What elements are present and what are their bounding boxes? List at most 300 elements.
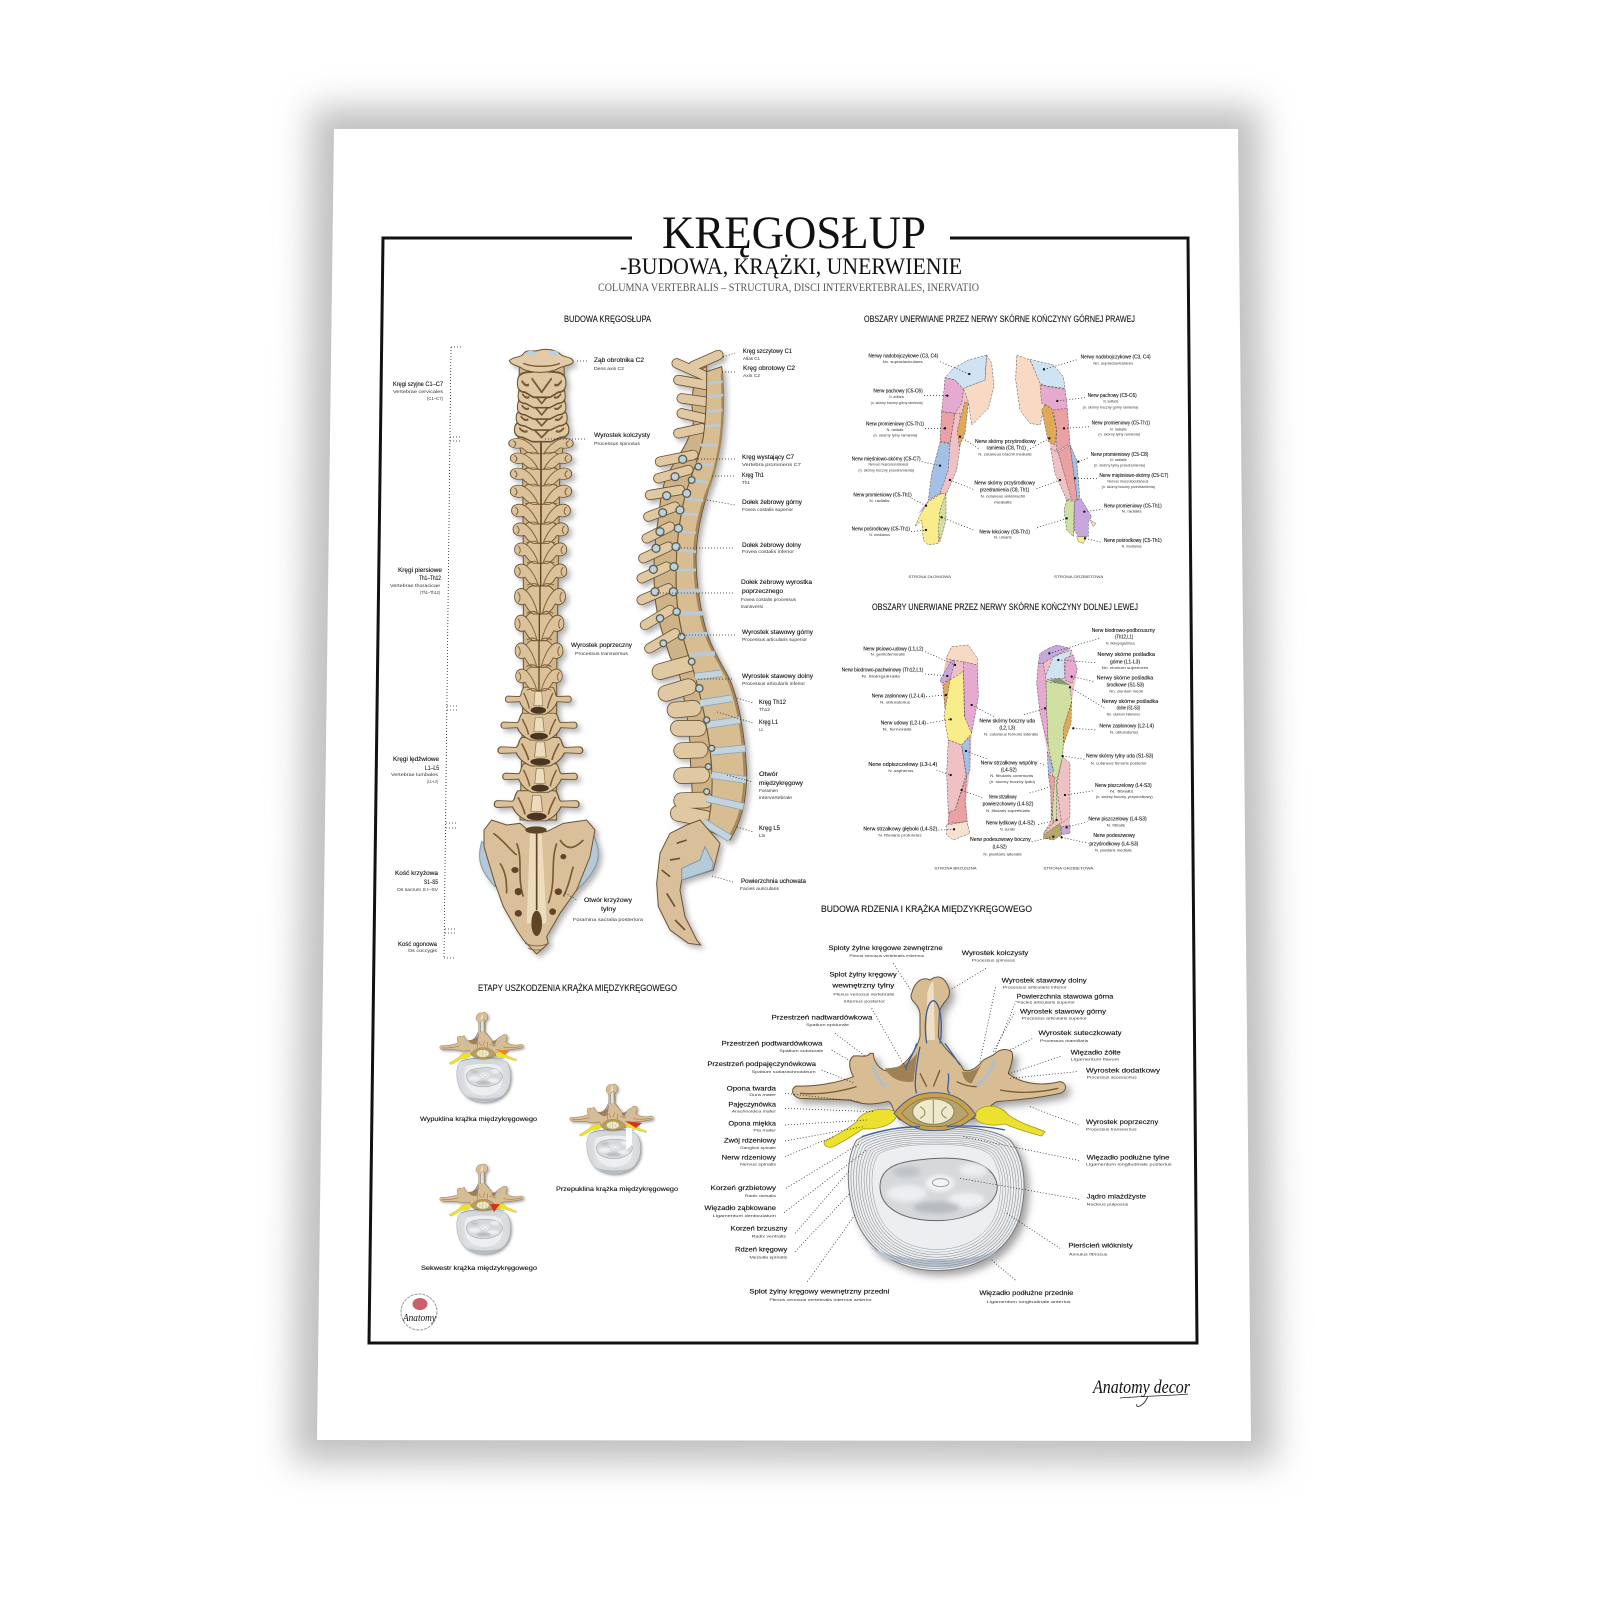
label: lumbar — [391, 756, 439, 784]
callout: common fibular: (L4-S2) — [1001, 767, 1017, 773]
callout: superior articular process — [993, 1008, 1107, 1052]
view captions — [908, 575, 1104, 579]
callout: inferior articular process: Wyrostek stawowy dolny — [742, 673, 814, 680]
callout: superior articular process: Processus articularis superior — [742, 637, 807, 642]
stage: disc bulge — [420, 1012, 537, 1123]
callout: median right — [1085, 538, 1162, 549]
callout: transverse process — [1030, 1107, 1159, 1131]
callout: inferior cluneal — [1070, 687, 1158, 717]
callout: medial brachial cutaneous: N. cutaneus brachii medialis — [978, 453, 1032, 457]
callout: posterior internal plexus: Splot żylny kręgowy — [829, 972, 897, 979]
label: thoracic — [390, 567, 442, 595]
callout: axillary right: N. axillaris — [1103, 399, 1118, 403]
callout: accessory process: Wyrostek dodatkowy — [1086, 1068, 1161, 1075]
callout: inferior articular process: Processus articularis inferior — [1003, 985, 1068, 990]
label: thoracic: Vertebrae thoracicae — [390, 583, 441, 588]
callout: inferior costal facet — [678, 542, 802, 554]
callout: anterior internal plexus: Plexus venosus vertebralis internus anterior — [769, 1297, 873, 1302]
label: lumbar: L1–L5 — [425, 765, 439, 772]
stage: disc herniation — [556, 1084, 678, 1193]
callout: iliohypogastric — [1049, 628, 1155, 653]
callout: saphenous — [868, 762, 951, 775]
callout: superior articular process — [680, 629, 814, 642]
callout: pia mater: Opona miękka — [728, 1120, 776, 1127]
callouts: posterior spine — [545, 357, 651, 922]
callout: common fibular: Nerw strzałkowy wspólny — [981, 760, 1038, 766]
heading: upper limb nerves: OBSZARY UNERWIANE PRZEZ NERWY SKÓRNE KOŃCZYNY GÓRNEJ PRAWEJ — [864, 314, 1135, 325]
callout: Th12: Th12 — [759, 707, 770, 712]
callout: axis: Kręg obrotowy C2 — [743, 365, 795, 372]
callout: transverse costal facet: Dołek żebrowy wyrostka — [741, 579, 812, 586]
callout: posterior femoral cutaneous — [1063, 754, 1154, 765]
callout: radial forearm right — [1078, 452, 1149, 468]
callout: transverse costal facet: Fovea costalis processus — [741, 597, 797, 602]
callout: transverse costal facet — [657, 579, 812, 609]
callout: superior costal facet — [707, 499, 803, 512]
callout: medial antebrachial cutaneous — [950, 480, 1060, 504]
posterior arch mass — [654, 367, 712, 823]
spinous processes — [642, 355, 718, 818]
label: cervical: (C1–C7) — [427, 396, 443, 401]
callout: middle cluneal: Nerwy skórne pośladka — [1097, 676, 1153, 682]
callout: posterior internal plexus: internus posterior — [844, 999, 886, 1004]
callout: axis — [722, 365, 795, 378]
callout: iliohypogastric: (Th12,L1) — [1115, 635, 1134, 641]
callout: medial plantar: N. plantaris medialis — [1095, 848, 1132, 852]
callout: superior cluneal: górne (L1-L3) — [1110, 660, 1140, 666]
cervical vertebrae — [514, 371, 569, 442]
label: coccyx: Kość ogonowa — [398, 941, 437, 948]
label: sacrum: Kość krzyżowa — [395, 870, 438, 877]
thoracic vertebrae — [509, 437, 573, 691]
callout: spinous process: Processus spinosus — [594, 441, 641, 446]
callout: iliohypogastric: Nerw biodrowo-podbrzuszny — [1092, 628, 1155, 634]
callout: radial left: N. radialis — [887, 428, 903, 432]
callout: obturator ventral — [872, 694, 946, 704]
callout: musculocutaneous left — [852, 456, 940, 472]
callout: radial left: (n. skórny tylny ramienia) — [873, 433, 917, 437]
callout: superior cluneal — [1058, 652, 1155, 670]
callout: Th12 — [737, 698, 786, 712]
callout: dorsal root — [711, 1143, 860, 1198]
callout: tibial: N. tibialis — [1110, 790, 1134, 794]
callout: spinal cord: Rdzeń kręgowy — [735, 1246, 788, 1253]
leg: ventral side — [940, 645, 978, 840]
callout: transverse process: Processus transversus — [1086, 1126, 1137, 1131]
callout: transverse costal facet: poprzecznego — [742, 588, 783, 595]
callout: spinous process — [545, 432, 651, 446]
heading: cord and disc: BUDOWA RDZENIA I KRĄŻKA MIĘDZYKRĘGOWEGO — [821, 904, 1032, 915]
spine region bracket — [444, 347, 461, 958]
view captions: STRONA GRZBIETOWA — [1043, 867, 1094, 871]
latin subtitle: COLUMNA VERTEBRALIS – STRUCTURA, DISCI INTERVERTEBRALES, INERVATIO — [598, 282, 979, 294]
callout: inferior articular process — [980, 978, 1087, 1062]
callout: accessory process — [1010, 1068, 1161, 1080]
callout: posterior femoral cutaneous: N. cutaneus femoris posterior — [1091, 761, 1148, 765]
poster frame — [369, 238, 1197, 1343]
callout: tibial — [1065, 783, 1153, 799]
callout: supraclavicular right: Nerwy nadobojczykowe (C3, C4) — [1081, 355, 1151, 361]
callout: accessory process: Processus accessorius — [1087, 1075, 1137, 1080]
callout: auricular surface: Powierzchnia uchowata — [741, 878, 806, 885]
logo: Anatomy brain badge — [401, 1294, 437, 1330]
callout: spinal cord — [735, 1193, 850, 1259]
intervertebral discs — [675, 382, 746, 838]
callout: posterior longitudinal ligament — [963, 1137, 1172, 1166]
callout: anterior internal plexus: Splot żylny kręgowy wewnętrzny przedni — [749, 1288, 890, 1295]
callout: medial plantar: przyśrodkowy (L4-S3) — [1089, 841, 1139, 847]
callout: subarachnoid space: Przestrzeń podpajęczynówkowa — [707, 1061, 816, 1068]
callout: dorsal root: Korzeń grzbietowy — [711, 1185, 777, 1192]
label: lumbar: Kręgi lędźwiowe — [393, 756, 439, 763]
callout: medial brachial cutaneous — [960, 437, 1049, 457]
callout: C7 — [695, 454, 802, 467]
callout: superficial fibular — [962, 787, 1051, 813]
callout: medial antebrachial cutaneous: medialis — [994, 500, 1012, 504]
callout: pia mater — [728, 1120, 867, 1133]
callout: posterior longitudinal ligament: Więzadło podłużne tylne — [1087, 1154, 1170, 1161]
callout: deep fibular: Nerw strzałkowy głęboki (L4-S2) — [863, 826, 938, 832]
callout: femoral — [881, 719, 951, 731]
callout: inferior costal facet: Dołek żebrowy dolny — [742, 542, 802, 549]
callout: supraclavicular left — [868, 354, 969, 374]
panel: disc damage stages — [420, 1012, 678, 1272]
callout: genitofemoral: Nerw płciowo-udowy (L1,L2) — [863, 646, 924, 652]
callout: posterior internal plexus: Plexus venosus vertebralis — [833, 992, 894, 997]
callout: axis: Axis C2 — [743, 373, 760, 378]
callout: L5: L5 — [759, 833, 766, 838]
callout: posterior internal plexus: wewnętrzny tylny — [831, 982, 895, 989]
callout: posterior longitudinal ligament: Ligamentum longitudinale posterius — [1086, 1161, 1172, 1166]
label: coccyx: Os coccygis — [408, 948, 438, 953]
callout: obturator ventral: N. obturatorius — [880, 700, 910, 704]
callout: musculocutaneous left: (n. skórny boczny przedramienia) — [858, 468, 914, 472]
callout: axillary left: Nerw pachowy (C5-C6) — [873, 388, 923, 394]
callout: C7: Kręg wystający C7 — [742, 454, 794, 461]
stage: disc herniation: Przepuklina krążka międzykręgowego — [556, 1186, 678, 1193]
callout: axillary right: Nerw pachowy (C5-C6) — [1088, 393, 1137, 399]
label: thoracic: (Th1–Th12) — [420, 590, 440, 595]
callout: musculocutaneous right — [1075, 473, 1169, 489]
callout: epidural space: Przestrzeń nadtwardówkowa — [772, 1014, 873, 1021]
callout: inferior articular process — [698, 673, 814, 686]
callout: common fibular: N. fibularis communis — [990, 774, 1034, 778]
callout: Th1 — [712, 472, 764, 485]
callout: dura mater: Opona twarda — [727, 1086, 776, 1093]
callout: subdural space: Przestrzeń podtwardówkowa — [722, 1040, 823, 1047]
callout: lateral femoral cutaneous: (L2, L3) — [999, 726, 1015, 732]
callout: Th12: Kręg Th12 — [759, 699, 786, 706]
callout: L1: Kręg L1 — [759, 719, 778, 726]
logo: Anatomy brain badge: Anatomy — [402, 1312, 436, 1324]
callout: radial hand right: N. radialis — [1122, 510, 1142, 514]
callout: axillary right: (n. skórny boczny górny ramienia) — [1083, 405, 1138, 409]
callout: spinal ganglion: Zwój rdzeniowy — [724, 1138, 777, 1145]
callout: obturator ventral: Nerw zasłonowy (L2-L4) — [872, 694, 925, 700]
heading: spine structure: BUDOWA KRĘGOSŁUPA — [564, 314, 652, 325]
label: sacrum: S1–S5 — [424, 879, 438, 886]
panel: lower limb dermatomes — [842, 628, 1158, 871]
callout: spinal nerve: Nervus spinalis — [740, 1162, 776, 1167]
callout: middle cluneal: środkowe (S1-S3) — [1107, 682, 1144, 688]
callout: posterior sacral foramen: Foramina sacralia posteriora — [573, 917, 644, 922]
nerve point markers — [946, 653, 1073, 837]
callout: Th1: Th1 — [742, 480, 750, 485]
callout: axillary right — [1057, 393, 1138, 409]
callout: spinous process: Wyrostek kolczysty — [962, 950, 1029, 957]
callout: ulnar — [942, 517, 1067, 540]
callout: superior articular surface — [995, 993, 1114, 1052]
callout: nucleus pulposus: Jądro miażdżyste — [1087, 1193, 1146, 1200]
callout: spinal cord: Medulla spinalis — [749, 1254, 787, 1259]
callout: arachnoid: Arachnoidea mater — [732, 1108, 777, 1113]
signature: Anatomy decor — [1091, 1377, 1190, 1407]
view captions: STRONA BRZUSZNA — [934, 867, 977, 871]
callout: supraclavicular left: Nerwy nadobojczykowe (C3, C4) — [868, 354, 939, 360]
callout: transverse process: Wyrostek poprzeczny — [1086, 1119, 1159, 1126]
heading: disc damage stages: ETAPY USZKODZENIA KRĄŻKA MIĘDZYKRĘGOWEGO — [478, 983, 677, 994]
callout: ilioinguinal: N. ilioinguinalis — [862, 675, 900, 679]
callout: radial hand left — [853, 492, 926, 506]
callout: anterior internal plexus — [749, 1215, 890, 1302]
callout: superior costal facet: Fovea costalis superior — [742, 507, 794, 512]
callout: radial right: (n. skórny tylny ramienia) — [1098, 433, 1140, 437]
callout: superior cluneal: Nn. clunium superiores — [1102, 666, 1149, 670]
callout: transverse process: Processus transversus — [575, 651, 629, 656]
callout: median left: N. medianus — [869, 533, 890, 537]
callout: medial plantar — [1062, 833, 1139, 852]
callout: lateral femoral cutaneous: N. cutaneus femoris lateralis — [984, 732, 1039, 736]
callout: spinal nerve: Nerw rdzeniowy — [722, 1154, 777, 1161]
callout: C7: Vertebra prominens C7 — [742, 462, 802, 467]
callout: iliohypogastric: N. iliohypogastricus — [1106, 641, 1135, 645]
callout: intervertebral foramen — [727, 771, 804, 800]
label: lumbar: Vertebrae lumbales — [391, 772, 439, 777]
callout: intervertebral foramen: międzykręgowy — [759, 780, 804, 787]
callout: median left: Nerw pośrodkowy (C5-Th1) — [852, 526, 910, 532]
callout: posterior femoral cutaneous: Nerw skórny tylny uda (S1-S3) — [1086, 754, 1154, 760]
callout: L5 — [737, 825, 780, 838]
callout: external venous plexus — [828, 945, 943, 990]
label: cervical: Kręgi szyjne C1–C7 — [393, 381, 443, 388]
callout: obturator dorsal — [1073, 724, 1154, 735]
signature: Anatomy decor: Anatomy decor — [1091, 1377, 1190, 1398]
callout: median left — [852, 526, 926, 537]
callout: superior cluneal: Nerwy skórne pośladka — [1097, 652, 1155, 658]
callout: arachnoid — [728, 1102, 873, 1113]
callout: deep fibular: N. fibularis profundus — [878, 833, 922, 837]
callout: tibial foot — [1067, 816, 1147, 827]
callout: sural: Nerw łydkowy (L4-S2) — [986, 820, 1035, 826]
spinal column base — [518, 367, 565, 820]
spine: lateral view — [642, 355, 747, 945]
callout: radial forearm right: (n. skórny tylny przedramienia) — [1094, 464, 1145, 468]
callout: transverse process: Wyrostek poprzeczny — [571, 642, 633, 649]
callout: medial antebrachial cutaneous: przedramienia (C8, Th1) — [980, 487, 1030, 493]
callout: ulnar: Nerw łokciowy (C8-Th1) — [979, 530, 1030, 536]
callout: L1: L1 — [759, 727, 763, 732]
arm: dorsal side — [1016, 355, 1096, 543]
callout: dens axis: Dens axis C2 — [594, 366, 624, 371]
callout: annulus fibrosus: Annulus fibrosus — [1069, 1251, 1107, 1256]
callout: spinal ganglion — [724, 1127, 863, 1150]
callout: superior articular process: Processus articularis superior — [1022, 1016, 1087, 1021]
callout: epidural space — [772, 1014, 873, 1056]
label: coccyx — [398, 941, 438, 953]
callout: supraclavicular right — [1044, 355, 1151, 369]
callout: dens axis — [577, 357, 644, 371]
callout: mamillary process: Wyrostek suteczkowaty — [1038, 1030, 1122, 1037]
callout: saphenous: N. saphenus — [888, 769, 914, 773]
callout: inferior articular process: Wyrostek stawowy dolny — [1002, 978, 1087, 985]
callout: radial forearm right: Nerw promieniowy (C5-C8) — [1091, 452, 1149, 458]
callout: lateral plantar: Nerw podeszwowy boczny — [970, 837, 1031, 843]
view captions: STRONA DŁONIOWA — [908, 575, 952, 579]
callout: radial left: Nerw promieniowy (C5-Th1) — [866, 421, 924, 427]
callout: lateral plantar: (L4-S2) — [993, 845, 1007, 851]
heading: lower limb nerves: OBSZARY UNERWIANE PRZEZ NERWY SKÓRNE KOŃCZYNY DOLNEJ LEWEJ — [872, 602, 1138, 613]
callout: atlas — [723, 348, 792, 361]
callout: L1 — [717, 712, 778, 732]
callout: auricular surface: Facies auricularis — [740, 886, 780, 891]
callout: superior articular process: Wyrostek stawowy górny — [742, 629, 814, 636]
label: cervical: Vertebrae cervicales — [393, 389, 444, 394]
callout: inferior articular process: Processus articularis inferior — [742, 681, 806, 686]
illustration: vertebra with disc — [793, 977, 1066, 1271]
callout: ligamentum flavum: Ligamentum flavum — [1071, 1056, 1120, 1061]
callout: radial hand left: Nerw promieniowy (C5-Th1) — [853, 492, 912, 498]
callout: femoral: N. femoralis — [883, 727, 912, 731]
stage: disc bulge: Wypuklina krążka międzykręgowego — [420, 1116, 537, 1123]
vertebral bodies — [676, 367, 747, 840]
callout: ulnar: N. ulnaris — [994, 536, 1012, 540]
nerve point markers — [926, 369, 1085, 538]
callout: superior costal facet: Dołek żebrowy górny — [742, 499, 803, 506]
callout: middle cluneal — [1072, 676, 1153, 693]
callout: middle cluneal: Nn. clunium medii — [1109, 689, 1143, 693]
callout: superior articular surface: Powierzchnia stawowa górna — [1017, 993, 1114, 1000]
callout: mamillary process: Processus mamillaris — [1040, 1038, 1088, 1043]
callout: superficial fibular: N. fibularis superficialis — [986, 809, 1030, 813]
view captions: STRONA GRZBIETOWA — [1054, 575, 1104, 579]
callout: genitofemoral: N. genitofemoralis — [871, 652, 905, 656]
icon: brain — [412, 1298, 428, 1310]
callout: intervertebral foramen: Otwór — [759, 771, 779, 778]
callout: supraclavicular right: Nn. supraclaviculares — [1093, 361, 1134, 365]
callout: epidural space: Spatium epidurale — [806, 1022, 850, 1027]
atlas — [509, 349, 573, 372]
callout: denticulate ligament: Więzadło ząbkowane — [704, 1205, 776, 1212]
callout: median right: N. medianus — [1122, 545, 1142, 549]
callout: superficial fibular: powierzchowny (L4-S2) — [983, 801, 1034, 807]
callout: medial brachial cutaneous: Nerw skórny przyśrodkowy — [975, 439, 1036, 445]
callout: radial hand left: N. radialis — [869, 499, 890, 503]
callout: tibial: (n. skórny boczny, przyśrodkowy) — [1096, 795, 1153, 799]
callout: common fibular: (n. skórny boczny łydki) — [989, 780, 1035, 784]
callout: dura mater — [727, 1086, 860, 1102]
callout: external venous plexus: Plexus venosus vertebralis externus — [849, 953, 924, 958]
callout: posterior sacral foramen: Otwór krzyżowy — [584, 897, 633, 904]
label: cervical — [393, 381, 444, 401]
callout: musculocutaneous left: Nervus musculocutaneus — [868, 462, 908, 466]
callout: posterior sacral foramen — [565, 893, 644, 922]
callout: nucleus pulposus — [960, 1178, 1146, 1206]
callout: musculocutaneous right: Nerw mięśniowo-skórny (C5-C7) — [1099, 473, 1169, 479]
callout: supraclavicular left: Nn. supraclaviculares — [883, 360, 923, 364]
callout: musculocutaneous right: Nervus musculocutaneus — [1107, 479, 1148, 483]
callout: radial hand right: Nerw promieniowy (C5-Th1) — [1104, 504, 1162, 510]
label: thoracic: Th1–Th12 — [419, 575, 441, 582]
arm: palmar side — [915, 355, 994, 545]
callout: radial right: N. radialis — [1110, 427, 1127, 431]
label: thoracic: Kręgi piersiowe — [398, 567, 442, 574]
callout: medial antebrachial cutaneous: Nerw skórny przyśrodkowy — [974, 480, 1035, 486]
callout: lateral femoral cutaneous: Nerw skórny boczny uda — [979, 719, 1035, 725]
callout: mamillary process — [1010, 1030, 1122, 1050]
callout: axillary left — [871, 388, 947, 405]
callout: genitofemoral — [863, 646, 955, 665]
callout: musculocutaneous left: Nerw mięśniowo-skórny (C5-C7) — [852, 456, 921, 462]
callouts: lateral spine — [657, 348, 814, 891]
paper shadow — [293, 107, 1275, 1463]
callout: inferior cluneal: Nerwy skórne pośladka — [1102, 699, 1158, 705]
callout: sural: N. suralis — [1000, 828, 1015, 832]
callout: obturator dorsal: N. obturatorius — [1110, 731, 1139, 735]
callout: anterior longitudinal ligament: Ligamentum longitudinale anterius — [987, 1299, 1071, 1304]
callout: pia mater: Pia mater — [753, 1128, 777, 1133]
callout: annulus fibrosus: Pierścień włóknisty — [1068, 1243, 1133, 1250]
callout: inferior cluneal: Nn. clunium inferiores — [1107, 713, 1140, 717]
callout: median right: Nerw pośrodkowy (C5-Th1) — [1104, 538, 1162, 544]
callout: transverse costal facet: transversi — [741, 604, 763, 609]
callout: sural — [986, 820, 1057, 832]
stage: disc sequestration: Sekwestr krążka międzykręgowego — [421, 1265, 538, 1272]
spine: posterior view — [479, 349, 598, 954]
callout: intervertebral foramen: Foramen — [759, 788, 778, 793]
panel: vertebra and disc detail — [704, 945, 1172, 1304]
callout: tibial foot: Nerw piszczelowy (L4-S3) — [1088, 816, 1147, 822]
callout: saphenous: Nerw odpiszczelowy (L3-L4) — [868, 762, 938, 768]
callout: radial right: Nerw promieniowy (C5-Th1) — [1092, 421, 1150, 427]
callout: dens axis: Ząb obrotnika C2 — [594, 357, 644, 364]
callout: anterior longitudinal ligament: Więzadło podłużne przednie — [979, 1290, 1074, 1297]
callout: external venous plexus: Sploty żylne kręgowe zewnętrzne — [828, 945, 943, 952]
region labels — [390, 381, 444, 953]
callout: tibial foot: N. tibialis — [1107, 823, 1125, 827]
callout: annulus fibrosus — [1007, 1213, 1133, 1256]
callout: nucleus pulposus: Nucleus pulposus — [1087, 1201, 1128, 1206]
callout: lateral plantar: N. plantaris lateralis — [983, 852, 1022, 856]
callout: transverse process — [571, 642, 633, 656]
callout: medial antebrachial cutaneous: N. cutaneus antebrachii — [981, 495, 1025, 499]
label: sacrum: Os sacrum S I–SV — [397, 887, 439, 892]
callout: ilioinguinal — [842, 667, 947, 679]
callout: anterior longitudinal ligament — [979, 1260, 1074, 1304]
callout: spinous process — [950, 950, 1029, 990]
sacrum and coccyx: lateral — [657, 820, 720, 945]
callout: femoral: Nerw udowy (L2-L4) — [881, 721, 926, 727]
callout: posterior internal plexus — [829, 972, 905, 1067]
callout: inferior costal facet: Fovea costalis inferior — [742, 549, 795, 554]
costal facets — [649, 455, 715, 795]
callout: arachnoid: Pajęczynówka — [728, 1102, 776, 1109]
callout: tibial: Nerw piszczelowy (L4-S3) — [1095, 783, 1152, 789]
callout: superior articular process: Wyrostek stawowy górny — [1020, 1008, 1107, 1015]
callout: atlas: Kręg szczytowy C1 — [743, 348, 792, 355]
callout: musculocutaneous right: (n. skórny boczny przedramienia) — [1102, 485, 1155, 489]
callout: radial hand right — [1084, 504, 1162, 514]
callout: common fibular — [966, 751, 1044, 784]
